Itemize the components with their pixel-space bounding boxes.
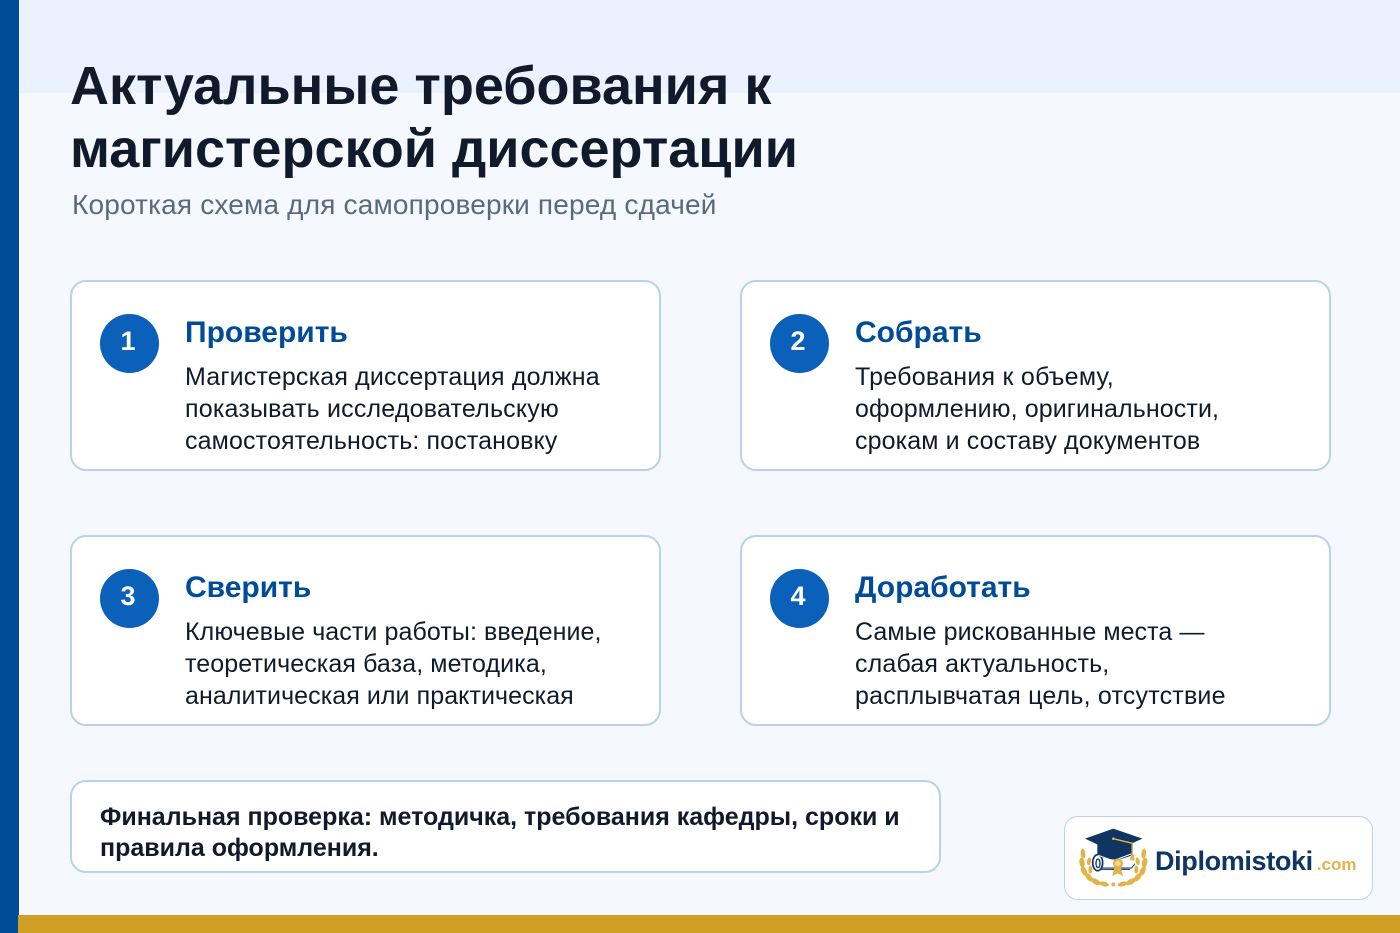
- heading: Доработать: Доработать: [855, 571, 1031, 604]
- text: step 4: слабая актуальность,: [855, 650, 1109, 678]
- panel: step 1: [70, 280, 661, 471]
- heading: Собрать: Собрать: [855, 316, 982, 349]
- title: Актуальные требования к: [70, 56, 771, 116]
- text: step 3: [185, 618, 602, 710]
- subtitle: Короткая схема для самопроверки перед сдачей: [72, 189, 717, 220]
- heading: Сверить: Сверить: [185, 571, 311, 604]
- text: final check: правила оформления.: [100, 834, 379, 862]
- number badge 2: 2: [790, 326, 806, 356]
- text: step 2: [855, 363, 1219, 455]
- left accent bar: [0, 0, 19, 933]
- text: step 2: срокам и составу документов: [855, 427, 1200, 455]
- number badge 3: [100, 569, 159, 628]
- panel: step 4: [740, 535, 1331, 726]
- panel: step 2: [740, 280, 1331, 471]
- logo wordmark: Diplomistoki.com: [1155, 846, 1357, 876]
- number badge 4: [770, 569, 829, 628]
- text: step 3: теоретическая база, методика,: [185, 650, 547, 678]
- icon: graduation cap with wreath: [1079, 828, 1148, 887]
- title: [70, 56, 798, 179]
- heading: Проверить: Проверить: [185, 316, 348, 349]
- panel: step 3: [70, 535, 661, 726]
- number badge 3: 3: [120, 581, 136, 611]
- text: step 1: самостоятельность: постановку: [185, 427, 558, 455]
- number badge 1: [100, 314, 159, 373]
- text: step 1: показывать исследовательскую: [185, 395, 559, 423]
- text: step 2: оформлению, оригинальности,: [855, 395, 1219, 423]
- number badge 1: 1: [120, 326, 136, 356]
- text: step 2: Требования к объему,: [855, 363, 1114, 391]
- text: step 3: аналитическая или практическая: [185, 682, 574, 710]
- bottom accent bar: [18, 915, 1400, 933]
- panel: final check callout: [70, 780, 941, 873]
- text: final check: [100, 803, 900, 862]
- number badge 2: [770, 314, 829, 373]
- number badge 4: 4: [790, 581, 806, 611]
- text: step 1: Магистерская диссертация должна: [185, 363, 600, 391]
- text: step 3: Ключевые части работы: введение,: [185, 618, 602, 646]
- text: step 1: [185, 363, 600, 455]
- text: step 4: Самые рискованные места —: [855, 618, 1204, 646]
- text: final check: Финальная проверка: методичка, требования кафедры, сроки и: [100, 803, 900, 831]
- panel: logo: [1064, 816, 1373, 900]
- text: step 4: расплывчатая цель, отсутствие: [855, 682, 1226, 710]
- top band: [18, 0, 1400, 93]
- title: магистерской диссертации: [70, 119, 798, 179]
- text: step 4: [855, 618, 1226, 710]
